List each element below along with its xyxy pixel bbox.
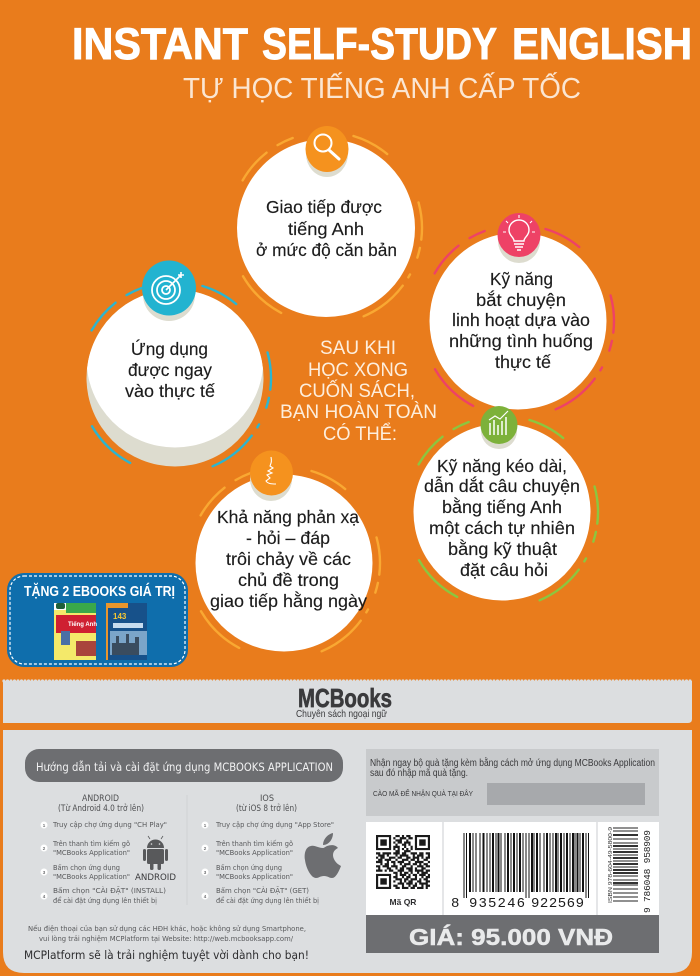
- ios steps: Trên thanh tìm kiếm gõ: [215, 839, 293, 848]
- text: practical use: [125, 338, 215, 401]
- icon: growth chart: [480, 406, 518, 444]
- text: storytelling: [424, 456, 580, 580]
- center heading: CUỐN SÁCH,: [299, 380, 415, 402]
- android steps: [40, 794, 167, 905]
- title: [72, 20, 692, 69]
- android steps: Truy cập chợ ứng dụng "CH Play": [52, 820, 167, 829]
- center heading: CÓ THỂ:: [323, 423, 397, 445]
- android steps: Bấm chọn "CÀI ĐẶT" (INSTALL): [53, 886, 166, 895]
- logo: MCBooks: [298, 683, 392, 713]
- QR code: [376, 835, 430, 889]
- text: basic communication: tiếng Anh: [288, 219, 364, 239]
- price bar: GIÁ: 95.000 VNĐ: [409, 923, 613, 950]
- ISBN barcode: [608, 827, 653, 913]
- footer note: [28, 924, 306, 943]
- text: storytelling: bằng kỹ thuật: [448, 538, 557, 559]
- tagline: Chuyên sách ngoại ngữ: [296, 708, 387, 720]
- book cover: 143 topics: [106, 603, 147, 660]
- text: conversation starter: linh hoạt dựa vào: [452, 310, 590, 330]
- text: reflex: [210, 507, 367, 611]
- android steps: "MCBooks Application": [53, 872, 130, 881]
- gift code box: [366, 749, 659, 816]
- android steps: Trên thanh tìm kiếm gõ: [52, 839, 130, 848]
- android steps: (Từ Android 4.0 trở lên): [58, 803, 144, 814]
- text: storytelling: một cách tự nhiên: [429, 518, 575, 538]
- center heading: SAU KHI: [320, 338, 396, 359]
- text: reflex: giao tiếp hằng ngày: [210, 590, 367, 611]
- text: conversation starter: [449, 269, 593, 372]
- coupon heading: TẶNG 2 EBOOKS GIÁ TRỊ: [24, 583, 175, 600]
- ios steps: 3: [204, 870, 207, 875]
- panel: storytelling circle: [384, 394, 620, 630]
- android steps: "MCBooks Application": [53, 848, 130, 857]
- product barcode: 922569: [531, 896, 584, 912]
- footer note: vui lòng trải nghiệm MCPlatform tại Website: http://web.mcbooksapp.com/: [39, 934, 293, 943]
- panel: bottom information: [3, 730, 692, 973]
- text: basic communication: [256, 197, 397, 260]
- ios steps: Truy cập chợ ứng dụng "App Store": [215, 820, 334, 829]
- footer note: Nếu điện thoại của bạn sử dụng các HĐH khác, hoặc không sử dụng Smartphone,: [28, 924, 306, 933]
- footer tagline: MCPlatform sẽ là trải nghiệm tuyệt vời dành cho bạn!: [24, 948, 309, 962]
- center heading: BẠN HOÀN TOÀN: [280, 402, 437, 423]
- panel: MCBooks logo band: [3, 681, 692, 723]
- panel: free ebooks coupon: [7, 573, 188, 667]
- text: storytelling: bằng tiếng Anh: [442, 496, 562, 517]
- text: conversation starter: Kỹ năng: [490, 269, 553, 289]
- text: reflex: Khả năng phản xạ: [217, 507, 359, 527]
- gift code box: CÀO MÃ ĐỂ NHẬN QUÀ TẠI ĐÂY: [373, 789, 473, 798]
- product barcode: 8: [451, 896, 459, 912]
- ios steps: (từ iOS 8 trở lên): [236, 803, 297, 814]
- ios steps: 2: [204, 846, 207, 851]
- center heading: HỌC XONG: [308, 360, 408, 381]
- ios steps: để cài đặt ứng dụng lên thiết bị: [216, 896, 319, 905]
- ios steps: "MCBooks Application": [216, 872, 293, 881]
- panel: reflex circle: [166, 445, 402, 681]
- android steps: ANDROID: [82, 794, 119, 804]
- text: reflex: chủ đề trong: [238, 570, 339, 590]
- book cover: 143 topics: 143: [113, 612, 127, 621]
- text: conversation starter: bắt chuyện: [476, 289, 566, 310]
- icon: light bulb: [498, 213, 540, 257]
- subtitle: TỰ HỌC TIẾNG ANH CẤP TỐC: [183, 71, 581, 105]
- product barcode: 935246: [469, 896, 525, 912]
- android wordmark: ANDROID: [135, 873, 176, 883]
- ios steps: "MCBooks Application": [216, 848, 293, 857]
- center heading: [280, 338, 437, 445]
- icon: target: [142, 260, 196, 316]
- android steps: Bấm chọn ứng dụng: [53, 863, 120, 872]
- android steps: 3: [43, 870, 46, 875]
- text: reflex: trôi chảy về các: [226, 549, 351, 569]
- ios steps: 1: [204, 823, 207, 828]
- text: basic communication: Giao tiếp được: [266, 197, 382, 217]
- book cover: test prep: [54, 603, 97, 660]
- panel: basic communication circle: [208, 110, 444, 346]
- price bar: [366, 915, 659, 953]
- android steps: để cài đặt ứng dụng lên thiết bị: [53, 896, 157, 905]
- title: INSTANT: [72, 20, 248, 69]
- text: conversation starter: những tình huống: [449, 331, 593, 351]
- icon: apple: [305, 833, 341, 878]
- ios steps: 4: [204, 894, 207, 899]
- product barcode: [451, 833, 588, 912]
- install guide header: Hướng dẫn tải và cài đặt ứng dụng MCBOOKS APPLICATION: [36, 761, 333, 774]
- icon: android robot: [143, 836, 168, 870]
- text: practical use: được ngay: [128, 360, 212, 380]
- ios steps: Bấm chọn "CÀI ĐẶT" (GET): [216, 886, 309, 895]
- gift code box: sau đó nhập mã quà tặng.: [370, 768, 468, 779]
- text: storytelling: dẫn dắt câu chuyện: [424, 475, 580, 496]
- ios steps: Bấm chọn ứng dụng: [216, 863, 282, 872]
- text: reflex: - hỏi – đáp: [246, 528, 330, 548]
- gift code box: Nhận ngay bộ quà tặng kèm bằng cách mở ứng dụng MCBooks Application: [370, 756, 655, 769]
- white code strip: [366, 822, 659, 915]
- android steps: 2: [43, 846, 46, 851]
- icon: speaking face: [250, 450, 293, 496]
- title: SELF-STUDY: [262, 20, 497, 69]
- QR label: Mã QR: [390, 897, 416, 907]
- android steps: 1: [43, 823, 46, 828]
- ios steps: IOS: [260, 794, 274, 804]
- text: basic communication: ở mức độ căn bản: [256, 240, 397, 260]
- book cover: test prep: Tiếng Anh: [68, 621, 97, 628]
- icon: magnifier: [306, 126, 348, 172]
- ISBN barcode: 9 786048 958909: [642, 830, 653, 913]
- panel: practical use circle: [86, 260, 272, 468]
- text: storytelling: đặt câu hỏi: [460, 560, 548, 580]
- text: practical use: vào thực tế: [125, 381, 215, 401]
- ISBN barcode: ISBN 978-604-49-5800-9: [608, 827, 614, 903]
- text: conversation starter: thực tế: [495, 352, 551, 372]
- install guide header: [25, 749, 343, 782]
- android steps: 4: [43, 894, 46, 899]
- text: practical use: Ứng dụng: [131, 338, 208, 359]
- ios steps: [202, 794, 334, 905]
- text: storytelling: Kỹ năng kéo dài,: [437, 456, 567, 476]
- panel: conversation starter circle: [400, 203, 636, 439]
